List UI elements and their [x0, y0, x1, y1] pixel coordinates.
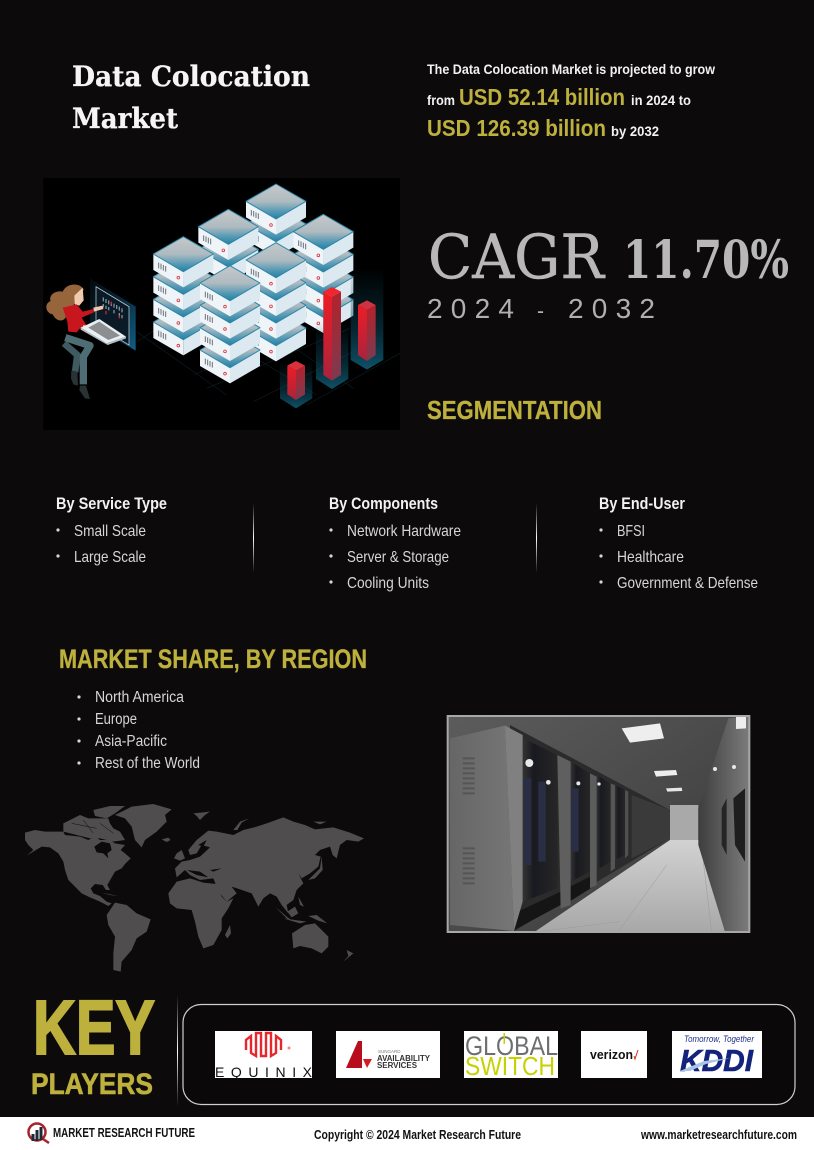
logo: Global Switch: SWITCH	[465, 1051, 555, 1081]
server rack stack, left	[153, 237, 213, 355]
server rack stack, back	[198, 184, 306, 283]
logo: Global Switch	[464, 1031, 558, 1081]
CAGR period	[427, 293, 655, 324]
key players heading: PLAYERS	[31, 1068, 153, 1101]
CAGR period: -	[537, 298, 544, 323]
bar: short	[280, 361, 312, 408]
market projection text: The Data Colocation Market is projected to grow	[427, 61, 715, 77]
logo: Sungard Availability Services: SUNGARD	[378, 1049, 401, 1054]
bar: medium	[351, 268, 383, 370]
logo: Verizon	[581, 1031, 647, 1078]
footer bar: Copyright © 2024 Market Research Future	[314, 1127, 521, 1142]
logo: KDDI	[672, 1031, 762, 1078]
illustration: data center servers	[43, 178, 400, 430]
CAGR value: CAGR	[428, 222, 606, 293]
market share heading: MARKET SHARE, BY REGION	[59, 644, 367, 674]
segment: by end-user	[599, 494, 758, 592]
title: Data Colocation	[72, 60, 310, 93]
market projection text: USD 52.14 billion	[459, 84, 625, 110]
world map	[25, 804, 364, 972]
region list	[77, 689, 200, 772]
segment: by end-user: Government & Defense	[617, 575, 758, 592]
server rack stack, front	[200, 266, 260, 383]
logo: Global Switch: GLOBAL	[465, 1031, 558, 1061]
segment: by service type: Large Scale	[74, 549, 146, 566]
key players heading	[31, 985, 155, 1101]
logo: Verizon: verizon	[590, 1047, 633, 1062]
logo: KDDI: KDDI	[680, 1043, 754, 1078]
market projection text: from	[427, 92, 455, 108]
segment: by service type	[56, 494, 167, 566]
segment: by end-user: By End-User	[599, 494, 685, 513]
title	[72, 60, 310, 135]
segment: by service type: Small Scale	[74, 523, 146, 540]
segment: by components: By Components	[329, 494, 438, 513]
segmentation heading: SEGMENTATION	[427, 395, 602, 425]
logo: Sungard Availability Services: AVAILABILITY	[377, 1054, 431, 1063]
logo: Sungard Availability Services: SERVICES	[377, 1061, 418, 1070]
segment: by components: Cooling Units	[347, 575, 429, 592]
region list: Rest of the World	[95, 755, 200, 772]
region list: Asia-Pacific	[95, 733, 167, 750]
holographic laptop screen	[90, 278, 136, 351]
region list: Europe	[95, 711, 137, 728]
server rack stack, right	[293, 214, 353, 333]
logo: Equinix	[215, 1031, 313, 1080]
bar: tall	[316, 287, 348, 389]
market projection text: USD 126.39 billion	[427, 115, 606, 141]
server rack stack, middle	[246, 243, 306, 361]
market projection text: by 2032	[611, 123, 659, 139]
logo: Equinix: EQUINIX	[215, 1064, 313, 1080]
segment: by components: Network Hardware	[347, 523, 461, 540]
logo: Sungard Availability Services	[336, 1031, 440, 1078]
segment: by end-user: BFSI	[617, 523, 645, 540]
key players panel	[183, 1004, 795, 1104]
footer logo icon	[28, 1124, 49, 1143]
person with laptop	[46, 284, 126, 399]
logo: KDDI: Tomorrow, Together	[684, 1034, 755, 1044]
CAGR period: 2 0 3 2	[568, 293, 655, 324]
segment: by components: Server & Storage	[347, 549, 449, 566]
CAGR value	[428, 222, 789, 293]
market projection text	[427, 61, 715, 141]
segment: by service type: By Service Type	[56, 494, 167, 513]
photo: data center aisle	[448, 716, 749, 932]
segment: by end-user: Healthcare	[617, 549, 684, 566]
market projection text: in 2024 to	[631, 92, 691, 108]
title: Market	[72, 102, 178, 135]
footer bar	[0, 1117, 814, 1150]
segment: by components	[329, 494, 461, 592]
region list: North America	[95, 689, 184, 706]
CAGR period: 2 0 2 4	[427, 293, 514, 324]
footer bar: MARKET RESEARCH FUTURE	[53, 1125, 195, 1140]
key players heading: KEY	[33, 985, 155, 1071]
